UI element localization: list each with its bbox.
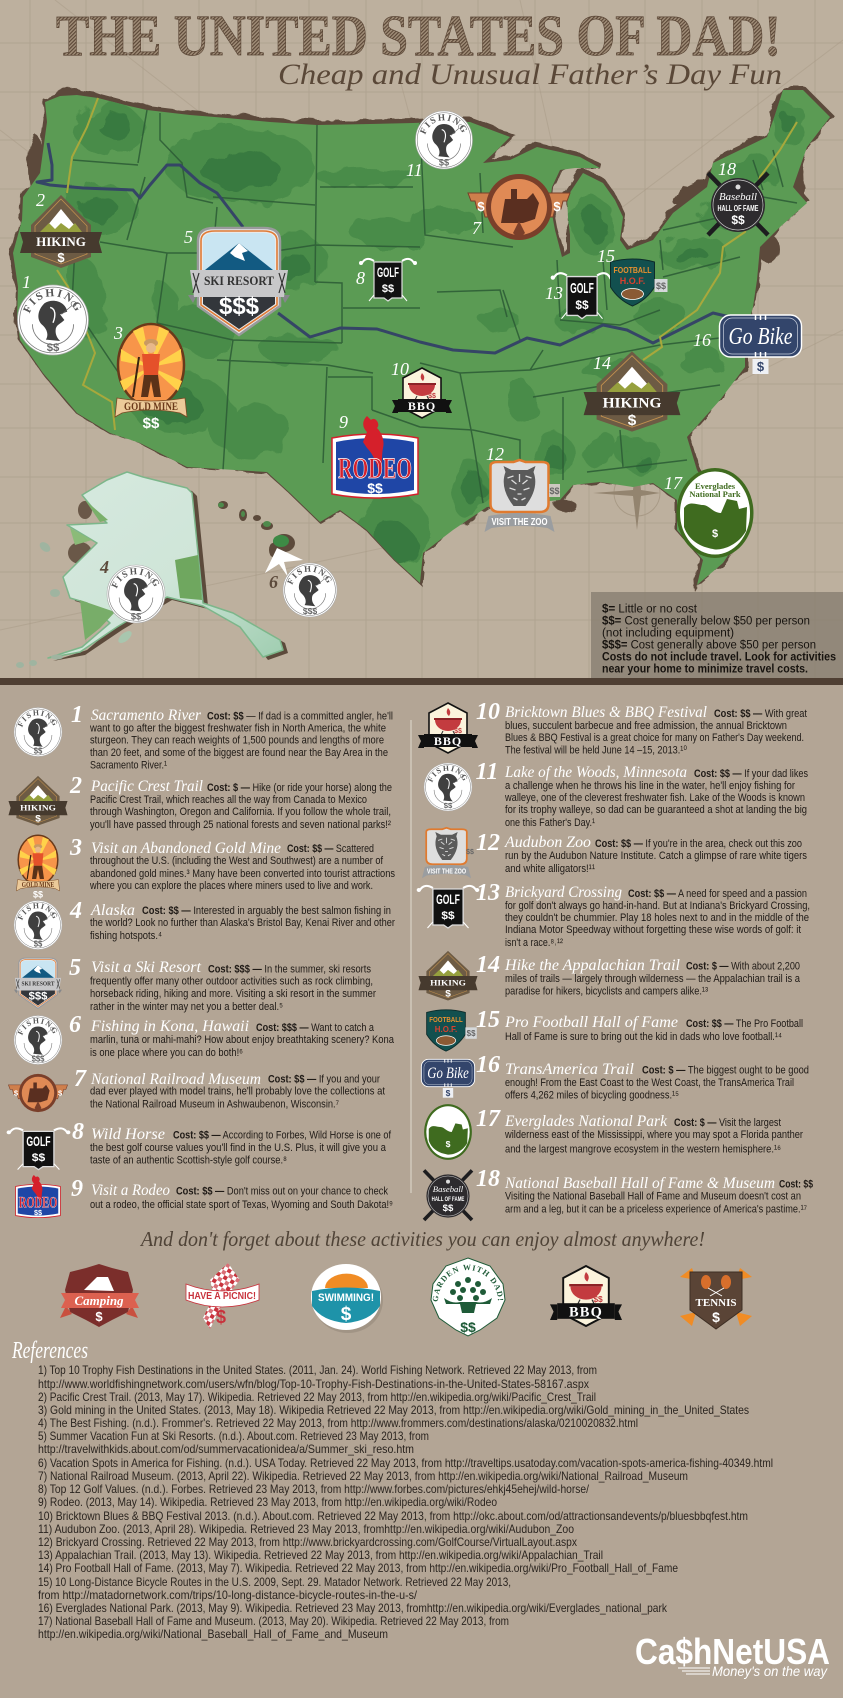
map marker 6: fishing Hawaii: $$$	[303, 606, 317, 616]
item 9: out a rodeo, the official state sport of Texas, Wyoming and South Dakota!⁹	[90, 1199, 393, 1211]
map marker 6: fishing Hawaii: FISHING	[287, 566, 332, 585]
item 9	[16, 1175, 393, 1218]
map number 18: 18	[718, 159, 736, 179]
item 8: taste of an authentic Scottish-style golf course.⁸	[90, 1155, 287, 1167]
item 16: Go Bike	[427, 1065, 469, 1082]
item 15: 15	[476, 1007, 500, 1033]
item 14: Cost: $ — With about 2,200	[686, 961, 800, 973]
item 11	[424, 759, 808, 829]
map number 11: 11	[406, 160, 423, 180]
references list: 17) National Baseball Hall of Fame and Museum. (2013, May 20). Wikipedia. Retrieved 22 May 2013, from	[38, 1614, 509, 1628]
map marker 13: golf: GOLF	[570, 280, 594, 297]
item 1: Sacramento River	[91, 707, 202, 724]
item 10: The festival will be held June 14 –15, 2013.¹⁰	[505, 745, 687, 757]
map number 5: 5	[184, 227, 193, 247]
map marker 2: hiking: $	[57, 250, 65, 265]
map marker 10: BBQ: BBQ	[408, 399, 436, 413]
map marker 7: railroad museum: $	[553, 199, 561, 214]
item 6: $$$	[32, 1054, 45, 1064]
item 14	[418, 951, 801, 1000]
references list: 2) Pacific Crest Trail. (2013, May 17). Wikipedia. Retrieved 22 May 2013, from http://en.wikipedia.org/wiki/Pacific_Crest_Trail	[38, 1390, 596, 1404]
item 1: than 20 feet, and some of the biggest are found near the Bay Area in the	[90, 747, 388, 759]
references list: 11) Audubon Zoo. (2013, April 28). Wikipedia. Retrieved 23 May 2013, fromhttp://en.wikipedia.org/wiki/Audubon_Zoo	[38, 1522, 574, 1536]
map marker 15: football	[610, 259, 668, 306]
item 1: Sacramento River.¹	[90, 760, 167, 772]
item 17: and the largest mangrove ecosystem in the western hemisphere.¹⁶	[505, 1143, 781, 1155]
item 16: Cost: $ — The biggest ought to be good	[642, 1065, 809, 1077]
references list: from http://matadornetwork.com/trips/10-long-distance-bicycle-routes-in-the-u-s/	[38, 1588, 418, 1602]
item 3: GOLD MINE	[22, 881, 54, 889]
references list: 16) Everglades National Park. (2013, May 9). Wikipedia. Retrieved 23 May 2013, fromhttp://en.wikipedia.org/wiki/Everglades_national_park	[38, 1601, 668, 1615]
item 4: 4	[69, 898, 82, 924]
map marker 15: football: FOOTBALL	[614, 266, 652, 275]
badge: tennis: TENNIS	[696, 1297, 736, 1309]
item 2: Cost: $ — Hike (or ride your horse) along the	[207, 782, 392, 794]
item 10: 10	[476, 699, 500, 725]
item 5: frequently offer many other outdoor activities such as rock climbing,	[90, 976, 373, 988]
item 8	[7, 1119, 392, 1170]
map marker 13: golf	[551, 273, 613, 319]
item 7: the National Railroad Museum in Ashwaubenon, Wisconsin.⁷	[90, 1099, 339, 1111]
map marker 1: fishing: $$	[47, 342, 60, 354]
item 9: Visit a Rodeo	[91, 1182, 170, 1199]
map number 3: 3	[113, 323, 123, 343]
map marker 8: golf: $$	[382, 283, 394, 295]
item 2: $	[35, 814, 41, 824]
item 6: Fishing in Kona, Hawaii	[90, 1018, 249, 1035]
map marker 12: zoo: VISIT THE ZOO	[492, 516, 548, 528]
badge: picnic: $	[216, 1307, 226, 1327]
item 11: FISHING	[428, 766, 468, 782]
references list: 3) Gold mining in the United States. (2013, May 18). Wikipedia Retrieved 22 May 2013, from http://en.wikipedia.org/wiki/Gold_mining_in_the_United_States	[38, 1403, 749, 1417]
hawaii islands	[218, 501, 295, 557]
map marker 12: zoo	[484, 460, 554, 532]
item 9: $$	[34, 1208, 42, 1217]
map marker 2: hiking	[20, 195, 102, 268]
map marker 9: rodeo: $$	[367, 480, 383, 496]
item 10: Cost: $$ — With great	[714, 708, 807, 720]
item 12: and white alligators!¹¹	[505, 863, 595, 875]
badge: tennis	[680, 1268, 752, 1329]
item 7: National Railroad Museum	[90, 1071, 261, 1088]
item 11: Cost: $$ — If your dad likes	[694, 768, 808, 780]
map marker 16: go bike: Go Bike	[728, 324, 793, 350]
map of contiguous United States	[0, 80, 843, 600]
cost legend: near your home to minimize travel costs.	[602, 664, 808, 676]
item 4: fishing hotspots.⁴	[90, 930, 162, 942]
item 4	[14, 898, 395, 950]
compass rose	[593, 455, 660, 530]
item 16: offers 4,262 miles of bicycling goodness.¹⁵	[505, 1090, 679, 1102]
map number 10: 10	[391, 359, 409, 379]
item 6: is one place where you can do both!⁶	[90, 1047, 243, 1059]
item 18: $$	[443, 1203, 454, 1214]
map number 8: 8	[356, 268, 365, 288]
anywhere activities heading: And don't forget about these activities you can enjoy almost anywhere!	[139, 1227, 705, 1251]
item 13: Brickyard Crossing	[505, 884, 622, 901]
item 3: throughout the U.S. (including the West and Southwest) are a number of	[90, 855, 384, 867]
badge: swimming: $	[341, 1304, 352, 1325]
item 2: Pacific Crest Trail	[90, 778, 204, 795]
column divider	[410, 720, 412, 1193]
badge: garden with dad: $$	[460, 1319, 476, 1335]
map marker 18: baseball: $$	[731, 213, 745, 227]
item 8: GOLF	[26, 1135, 51, 1150]
references list: 13) Appalachian Trail. (2013, May 13). Wikipedia. Retrieved 22 May 2013, from http://en.wikipedia.org/wiki/Appalachian_Trail	[38, 1548, 603, 1562]
item 13: 13	[476, 880, 500, 906]
map number 13: 13	[545, 283, 563, 303]
map marker 17: everglades	[676, 468, 754, 558]
item 11: a challenge when he throws his line in the water, he'll enjoy fishing for	[505, 780, 795, 792]
lower panel background	[0, 678, 843, 1698]
item 18: National Baseball Hall of Fame & Museum	[504, 1175, 775, 1192]
subtitle: Cheap and Unusual Father’s Day Fun	[278, 58, 782, 91]
item 17: $	[446, 1139, 451, 1149]
item 12: Cost: $$ — If you're in the area, check out this zoo	[595, 838, 802, 850]
map marker 15: football: H.O.F.	[620, 276, 645, 286]
item 15: Pro Football Hall of Fame	[504, 1014, 678, 1031]
item 1: $$	[34, 746, 43, 756]
trail: Pacific Crest	[57, 98, 115, 430]
badge: picnic	[186, 1263, 259, 1329]
item 14: 14	[476, 952, 500, 978]
item 18	[424, 1166, 813, 1220]
item 14: HIKING	[430, 978, 466, 987]
references list: 9) Rodeo. (2013, May 14). Wikipedia. Retrieved 23 May 2013, from http://en.wikipedia.org/wiki/Rodeo	[38, 1495, 497, 1509]
item 11: 11	[476, 759, 498, 785]
item 18: HALL OF FAME	[432, 1196, 465, 1203]
references heading: References	[11, 1338, 88, 1364]
cost legend: $$= Cost generally below $50 per person	[602, 616, 810, 628]
item 7: $	[58, 1088, 63, 1097]
map marker 17: everglades: National Park	[689, 489, 741, 499]
item 5: horseback riding, hiking and more. Visiting a ski resort in the summer	[90, 988, 376, 1000]
item 13: isn't a race.⁸˒¹²	[505, 937, 563, 949]
item 17: 17	[476, 1106, 501, 1132]
item 4: $$	[34, 939, 43, 949]
item 5: $$$	[29, 990, 48, 1002]
map marker 1: fishing	[17, 284, 89, 356]
item 7: $	[14, 1088, 19, 1097]
map number 9: 9	[339, 412, 348, 432]
item 15	[427, 1007, 803, 1051]
item 17: Everglades National Park	[504, 1113, 668, 1130]
item 14: miles of trails — largely through wilderness — the Appalachian trail is a	[505, 973, 801, 985]
item 5	[14, 955, 376, 1013]
item 8: $$	[32, 1152, 46, 1164]
item 1: want to go after the biggest freshwater fish in North America, the white	[89, 722, 386, 734]
references list: 8) Top 12 Golf Values. (n.d.). Forbes. Retrieved 23 May 2013, from http://www.forbes.com/pictures/ehkj45ehej/wild-horse/	[38, 1482, 590, 1496]
references list: 15) 10 Long-Distance Bicycle Routes in the U.S. 2009, Sept. 29. Matador Network. Retrieved 22 May 2013,	[38, 1575, 511, 1589]
map marker 5: ski resort: $$$	[219, 293, 260, 320]
map marker 8: golf: GOLF	[377, 264, 399, 280]
references list: 5) Summer Vacation Fun at Ski Resorts. (n.d.). About.com. Retrieved 23 May 2013, from	[38, 1429, 429, 1443]
references list: 4) The Best Fishing. (n.d.). Frommer's. Retrieved 22 May 2013, from http://www.frommers.com/destinations/alaska/0210020832.html	[38, 1416, 638, 1430]
cost legend: $= Little or no cost	[602, 604, 698, 616]
map marker 6: fishing Hawaii	[282, 562, 338, 618]
item 3: abandoned gold mines.³ Many have been converted into tourist attractions	[90, 868, 395, 880]
badge: BBQ: BBQ	[569, 1304, 603, 1320]
map marker 7: railroad museum	[468, 174, 570, 240]
item 8: Wild Horse	[91, 1126, 165, 1143]
map marker 5: ski resort	[188, 228, 290, 335]
item 6: 6	[69, 1012, 81, 1038]
map marker 8: golf	[359, 259, 417, 301]
item 7: Cost: $$ — If you and your	[268, 1074, 380, 1086]
item 13: Indiana Motor Speedway without forgetting these wise words of golf: it	[505, 924, 801, 936]
references list: 14) Pro Football Hall of Fame. (2013, May 7). Wikipedia. Retrieved 22 May 2013, from http://en.wikipedia.org/wiki/Pro_Football_Hall_of_Fame	[38, 1561, 678, 1575]
item 4: the world? Look no further than Alaska's Bristol Bay, Kenai River and other	[90, 917, 395, 929]
item 7: 7	[74, 1066, 87, 1092]
cost legend: $$$= Cost generally above $50 per person	[602, 640, 816, 652]
item 7	[8, 1066, 385, 1112]
map marker 3: gold mine	[115, 324, 187, 432]
item 8: Cost: $$ — According to Forbes, Wild Horse is one of	[173, 1130, 392, 1142]
item 3: where you can explore the places where miners used to live and work.	[89, 880, 373, 892]
item 2: Pacific Crest Trail, which reaches all the way from Canada to Mexico	[90, 794, 367, 806]
item 9: RODEO	[19, 1194, 57, 1211]
item 9: 9	[71, 1176, 83, 1202]
map marker 1: fishing: FISHING	[22, 288, 82, 314]
map number 16: 16	[693, 330, 711, 350]
badge: camping: $	[95, 1309, 103, 1324]
badge: picnic: HAVE A PICNIC!	[188, 1290, 256, 1302]
item 5: 5	[69, 955, 81, 981]
references list: http://en.wikipedia.org/wiki/National_Baseball_Hall_of_Fame_and_Museum	[38, 1627, 388, 1641]
map marker 18: baseball: HALL OF FAME	[718, 204, 759, 213]
item 5: rather in the winter may net you a better deal.⁵	[90, 1001, 283, 1013]
item 10: $$	[454, 728, 462, 735]
item 12: Audubon Zoo	[504, 834, 591, 851]
badge: garden with dad: GARDEN WITH DAD!	[432, 1264, 504, 1302]
item 5: SKI RESORT	[22, 981, 54, 987]
map marker 9: rodeo: RODEO	[338, 452, 412, 485]
item 4: Cost: $$ — Interested in arguably the best salmon fishing in	[142, 905, 391, 917]
item 17	[424, 1104, 803, 1160]
map marker 2: hiking: HIKING	[36, 234, 86, 249]
item 2: through Washington, Oregon and California. If you follow the whole trail,	[90, 806, 391, 818]
item 1: Cost: $$ — If dad is a committed angler, he'll	[207, 711, 393, 723]
badge: tennis: $	[712, 1309, 720, 1325]
map marker 13: golf: $$	[575, 298, 589, 312]
map background: aged paper	[0, 0, 843, 678]
map marker 16: go bike: $	[757, 359, 765, 374]
item 17: Cost: $ — Visit the largest	[674, 1117, 781, 1129]
CashNetUSA logo: Money's on the way	[712, 1663, 828, 1679]
badge: swimming	[311, 1264, 383, 1333]
map number 14: 14	[593, 353, 611, 373]
map marker 4: fishing Alaska: FISHING	[111, 568, 160, 588]
item 15: $$	[467, 1029, 476, 1038]
map marker 3: gold mine: $$	[143, 415, 160, 432]
map marker 18: baseball	[708, 173, 768, 235]
item 2: 2	[69, 773, 82, 799]
badge: garden with dad	[430, 1258, 506, 1336]
map marker 18: baseball: Baseball	[719, 191, 757, 203]
item 7: dad ever played with model trains, he'll probably love the collections at	[90, 1086, 385, 1098]
map marker 15: football: $$	[656, 281, 666, 291]
map marker 14: hiking	[584, 351, 680, 432]
item 3	[16, 835, 395, 900]
references list: 7) National Railroad Museum. (2013, April 22). Wikipedia. Retrieved 22 May 2013, from http://en.wikipedia.org/wiki/National_Railroad_Museum	[38, 1469, 688, 1483]
map marker 10: BBQ: $$	[428, 393, 436, 400]
item 15: FOOTBALL	[429, 1017, 463, 1024]
item 11: $$	[444, 801, 453, 810]
item 14: $	[445, 989, 451, 999]
references list: 10) Bricktown Blues & BBQ Festival 2013. (n.d.). About.com. Retrieved 22 May 2013, from http://okc.about.com/od/attractionsandevents/p/bluesbbqfest.htm	[38, 1509, 748, 1523]
item 18: Baseball	[433, 1184, 464, 1194]
map marker 7: railroad museum: $	[477, 199, 485, 214]
badge: BBQ: $$	[593, 1294, 603, 1304]
references list: 1) Top 10 Trophy Fish Destinations in the United States. (2011, Jan. 24). World Fishing Network. Retrieved 22 May 2013, from	[38, 1363, 597, 1377]
map marker 11: fishing Minnesota: $$	[439, 157, 449, 168]
item 10: BBQ	[434, 734, 462, 748]
item 9: Cost: $$ — Don't miss out on your chance to check	[176, 1186, 388, 1198]
map marker 4: fishing Alaska	[106, 564, 166, 624]
map marker 10: BBQ	[392, 368, 452, 418]
item 12: $$	[466, 849, 474, 856]
item 12: 12	[476, 830, 500, 856]
item 13	[417, 880, 810, 949]
item 1: sturgeon. They can reach weights of 1,500 pounds and lengths of more	[90, 735, 384, 747]
item 1	[14, 702, 393, 772]
map number 15: 15	[597, 246, 615, 266]
item 1: 1	[71, 702, 83, 728]
item 11: one this Father's Day.¹	[505, 817, 595, 829]
item 1: FISHING	[18, 710, 58, 728]
map marker 14: hiking: $	[628, 413, 637, 429]
item 14: paradise for hikers, bicyclists and campers alike.¹³	[505, 986, 708, 998]
map number 6: 6	[269, 572, 278, 592]
item 8: 8	[72, 1119, 84, 1145]
references list: http://www.worldfishingnetwork.com/users/wfn/blog/Top-10-Trophy-Fish-Destinations-in-the-United-States-58167.aspx	[38, 1377, 589, 1391]
item 10: Bricktown Blues & BBQ Festival	[505, 704, 708, 721]
item 4: Alaska	[90, 902, 135, 919]
item 6: FISHING	[18, 1018, 58, 1036]
item 3: Cost: $$ — Scattered	[287, 843, 374, 855]
badge: camping	[60, 1264, 139, 1327]
item 12: VISIT THE ZOO	[427, 866, 466, 875]
item 5: Cost: $$$ — In the summer, ski resorts	[208, 964, 371, 976]
item 13: $$	[441, 910, 455, 922]
badge: swimming: SWIMMING!	[318, 1292, 374, 1304]
references list	[38, 1363, 773, 1641]
badge: BBQ	[550, 1266, 622, 1326]
item 2: HIKING	[20, 803, 56, 812]
references list: http://travelwithkids.about.com/od/summervacationidea/a/Summer_ski_reso.htm	[38, 1442, 414, 1456]
item 3: $$	[33, 890, 43, 900]
map marker 11: fishing Minnesota: FISHING	[420, 114, 467, 134]
item 6: marlin, tuna or mahi-mahi? How about enjoy breathtaking scenery? Kona	[90, 1034, 395, 1046]
cost legend: (not including equipment)	[602, 628, 734, 640]
map marker 5: ski resort: SKI RESORT	[204, 273, 274, 288]
item 6: Cost: $$$ — Want to catch a	[256, 1022, 375, 1034]
item 3: Visit an Abandoned Gold Mine	[91, 840, 281, 857]
item 10	[418, 699, 807, 757]
map number 7: 7	[472, 218, 482, 238]
item 11: Lake of the Woods, Minnesota	[504, 764, 687, 781]
item 2: you'll have passed through 25 national forests and seven national parks!²	[90, 819, 391, 831]
item 12	[422, 828, 807, 878]
map marker 11: fishing Minnesota	[415, 110, 473, 170]
map marker 4: fishing Alaska: $$	[131, 612, 142, 622]
map marker 3: gold mine: GOLD MINE	[124, 399, 178, 413]
map number 17: 17	[664, 473, 683, 493]
arrow pointing to Kona	[265, 548, 303, 577]
item 3: 3	[69, 835, 82, 861]
item 16	[421, 1052, 809, 1102]
item 15: H.O.F.	[435, 1025, 457, 1034]
references list: 12) Brickyard Crossing. Retrieved 22 May 2013, from http://www.brickyardcrossing.com/GolfCourse/VirtualLayout.aspx	[38, 1535, 577, 1549]
item 16: TransAmerica Trail	[505, 1061, 635, 1078]
cost tag 12: $$	[549, 486, 560, 496]
item 13: Cost: $$ — A need for speed and a passion	[628, 888, 807, 900]
map marker 9: rodeo	[332, 416, 418, 498]
item 14: Hike the Appalachian Trail	[504, 957, 681, 974]
item 18: Cost: $$	[779, 1179, 813, 1191]
item 16: $	[446, 1088, 451, 1098]
item 15: Hall of Fame is sure to bring out the kid in dads who love football.¹⁴	[505, 1031, 782, 1043]
item 18: 18	[476, 1166, 500, 1192]
badge: camping: Camping	[74, 1293, 124, 1308]
item 2	[8, 773, 392, 831]
trail: TransAmerica	[37, 143, 730, 353]
item 16: 16	[476, 1052, 500, 1078]
map marker 17: everglades: $	[712, 528, 718, 540]
trail: Appalachian	[643, 122, 797, 360]
map number 4: 4	[99, 557, 109, 577]
map number 1: 1	[22, 272, 31, 292]
map number 2: 2	[36, 190, 45, 210]
item 13: GOLF	[436, 892, 460, 908]
map number 12: 12	[486, 444, 504, 464]
alaska	[16, 472, 288, 668]
item 5: Visit a Ski Resort	[91, 959, 202, 976]
map marker 16: go bike	[720, 315, 802, 374]
item 15: Cost: $$ — The Pro Football	[686, 1018, 803, 1030]
item 6	[14, 1012, 395, 1065]
item 4: FISHING	[18, 903, 58, 920]
map marker 17: everglades: Everglades	[695, 481, 736, 491]
item 8: the best golf course values you'll find in the U.S. Plus, it will give you a	[90, 1142, 387, 1154]
map marker 14: hiking: HIKING	[603, 396, 662, 411]
cost legend	[591, 592, 843, 678]
item 10: blues, succulent barbecue and free admission, the annual Bricktown	[505, 720, 787, 732]
